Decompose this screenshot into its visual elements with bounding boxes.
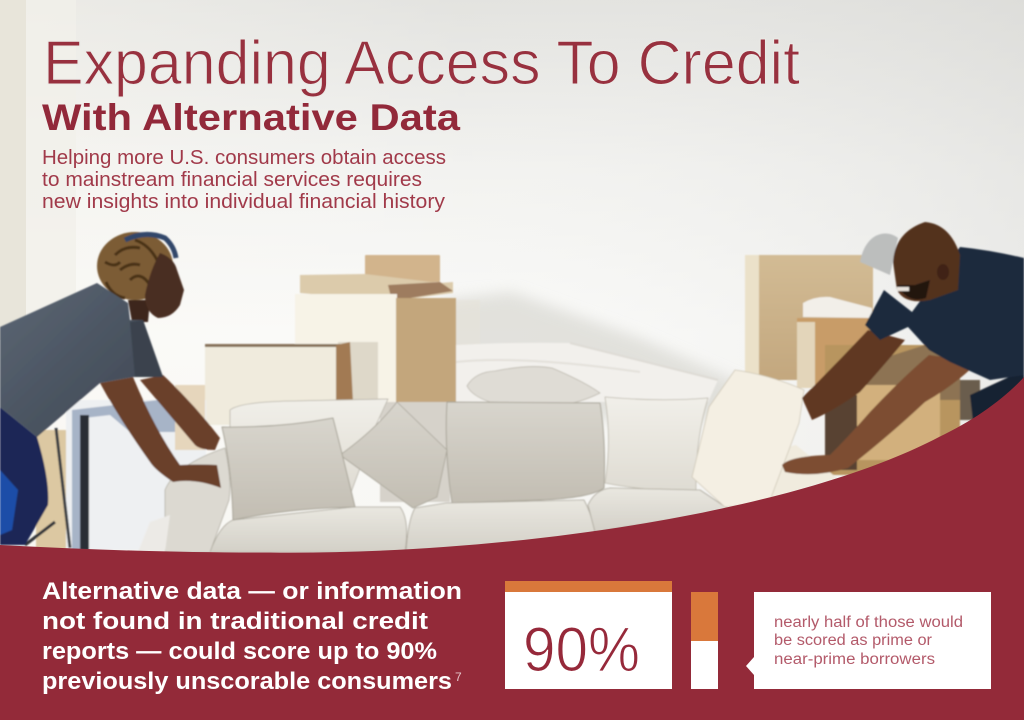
callout: be scored as prime or <box>774 632 932 649</box>
boxes behind the woman <box>205 255 480 425</box>
intro text: new insights into individual financial history <box>42 191 445 213</box>
subtitle: With Alternative Data <box>42 97 460 138</box>
sofa <box>138 343 837 552</box>
man <box>782 222 1024 474</box>
photo: couple moving a sofa <box>0 0 1024 560</box>
intro text <box>42 147 446 213</box>
intro text: to mainstream financial services requires <box>42 169 422 191</box>
key message: not found in traditional credit <box>42 608 428 635</box>
woman <box>0 232 221 545</box>
stat card: 90% <box>505 581 672 689</box>
key message: reports — could score up to 90% <box>42 638 437 665</box>
key message: 7 <box>455 670 462 684</box>
red curved panel <box>0 377 1024 720</box>
intro text: Helping more U.S. consumers obtain access <box>42 147 446 169</box>
key message <box>42 578 462 695</box>
stat card: 90%: 90% <box>523 615 640 685</box>
callout: near-prime borrowers <box>774 651 935 668</box>
callout <box>746 592 991 689</box>
key message: previously unscorable consumers <box>42 668 452 695</box>
plastic-wrapped item <box>25 385 206 550</box>
callout: nearly half of those would <box>774 614 963 631</box>
title: Expanding Access To Credit <box>43 29 800 98</box>
progress bar: half filled <box>691 592 718 689</box>
key message: Alternative data — or information <box>42 578 462 605</box>
boxes behind the man <box>745 233 980 475</box>
